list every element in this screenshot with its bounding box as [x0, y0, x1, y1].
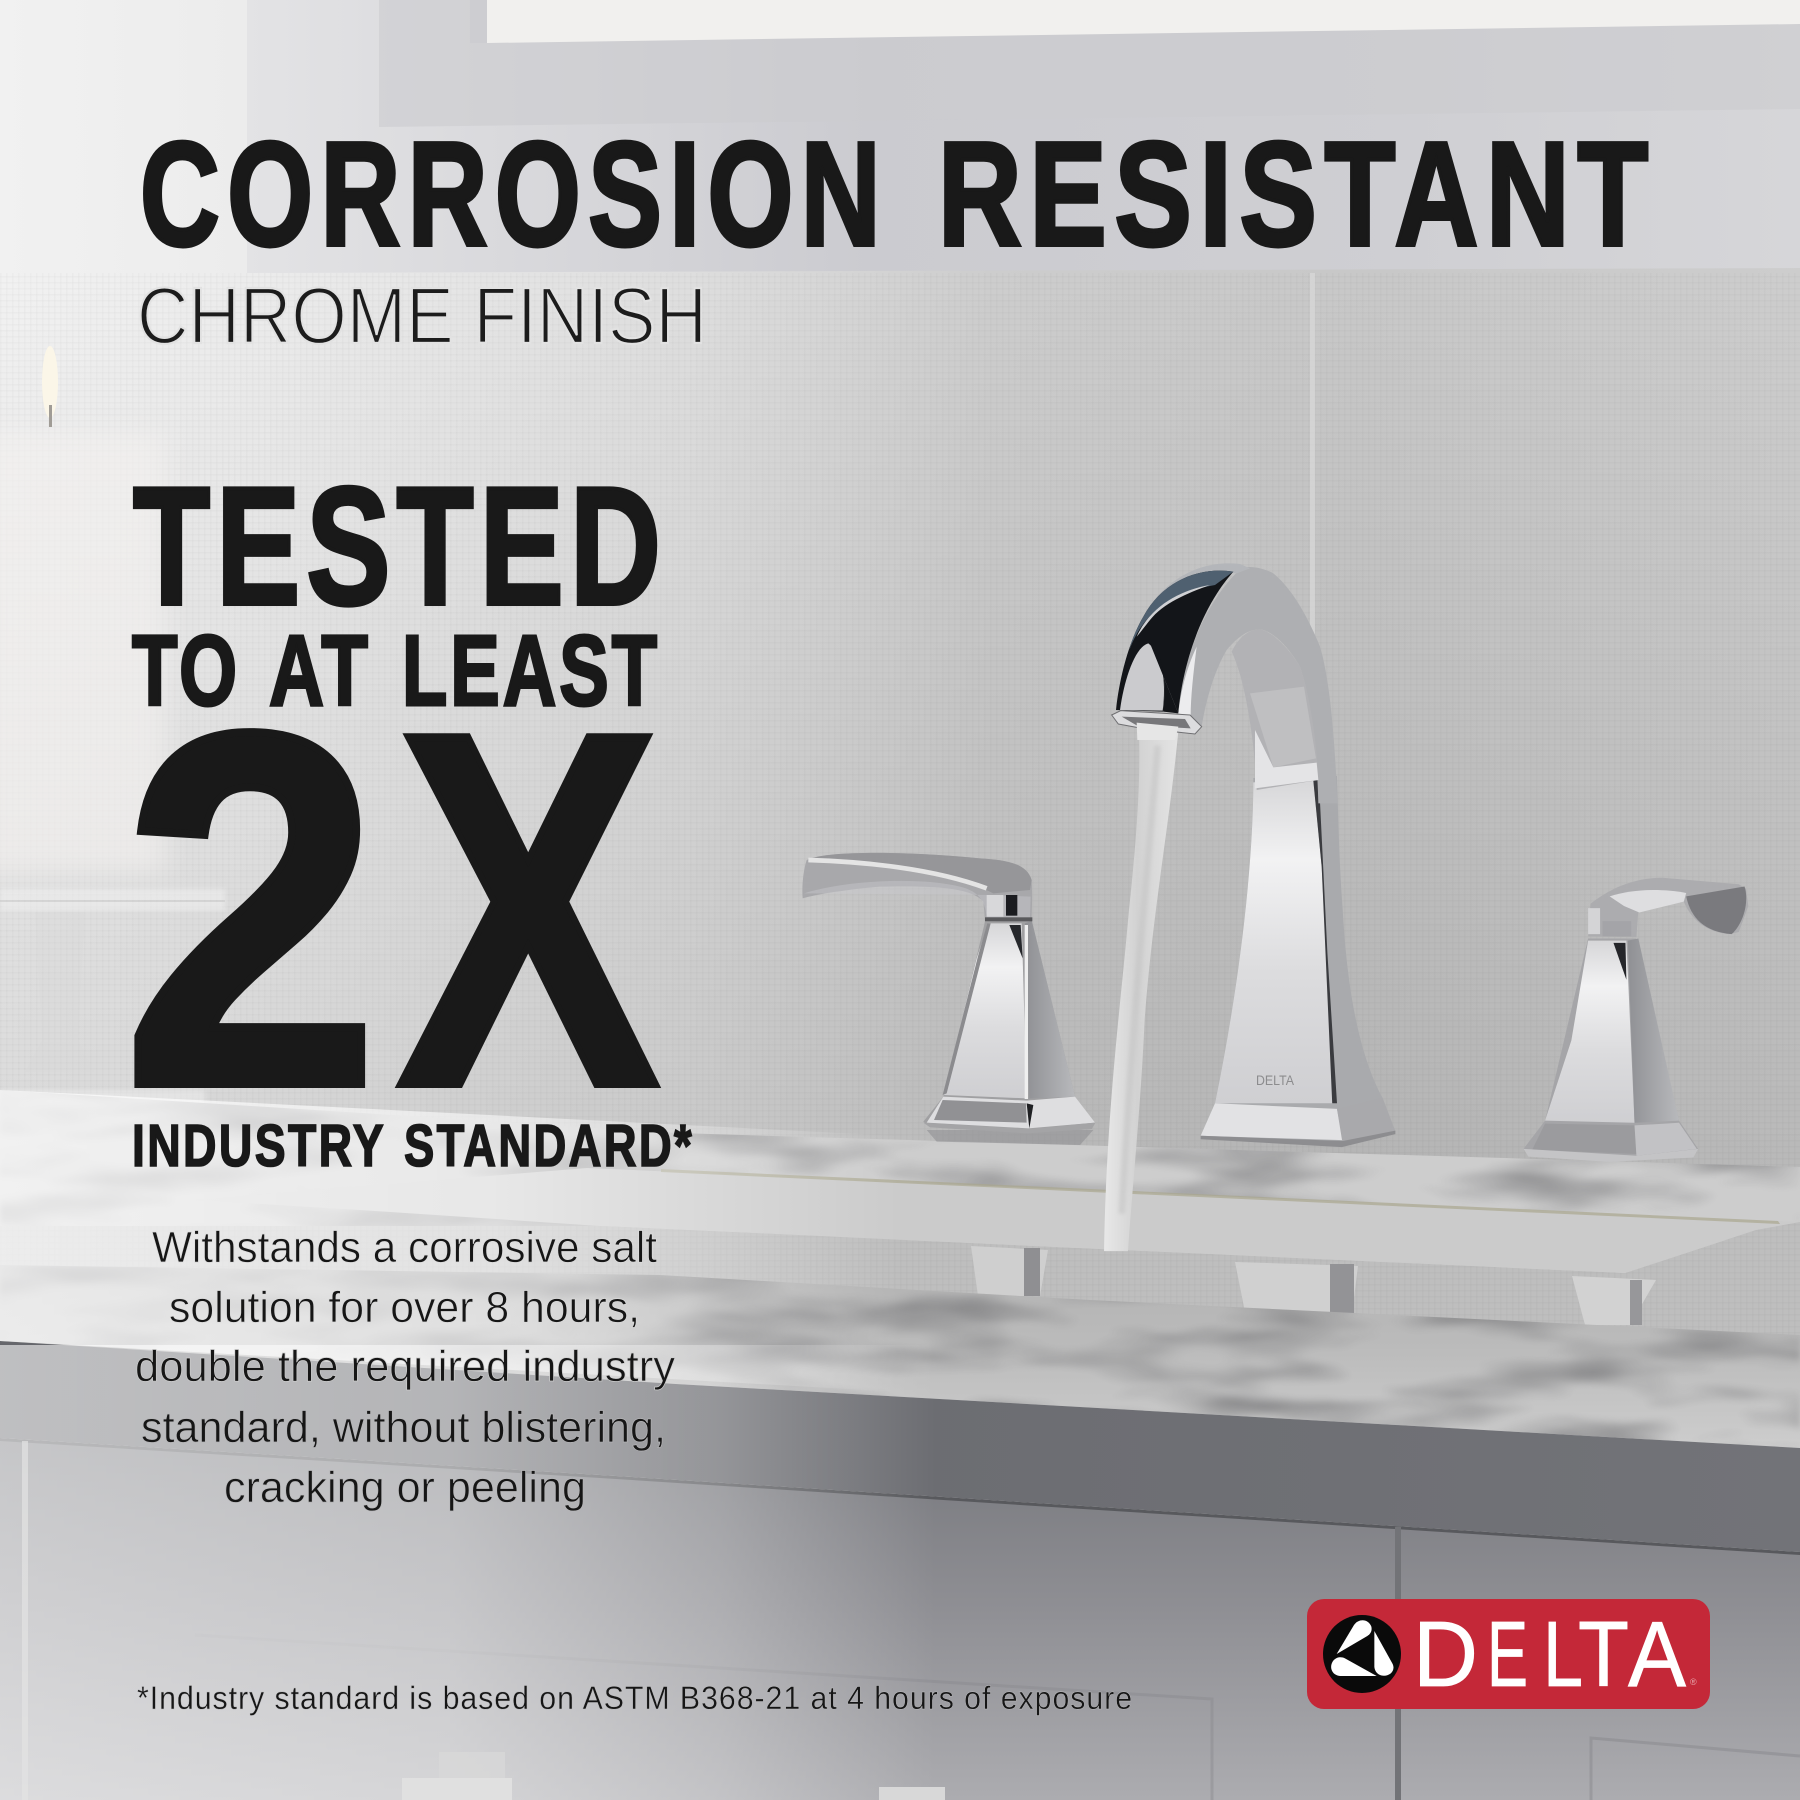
- background: glass cake stand: [0, 889, 225, 1136]
- body text: solution for over 8 hours,: [169, 1283, 640, 1332]
- Delta logo: [1307, 1599, 1710, 1709]
- body text: double the required industry: [135, 1342, 675, 1391]
- headline: industry standard: INDUSTRY: [132, 1113, 386, 1179]
- headline: tested: TESTED: [133, 452, 667, 640]
- headline: to at least: AT: [269, 615, 371, 727]
- cabinet door pull: [879, 1787, 945, 1800]
- headline: 2X: [122, 628, 661, 1191]
- background: candle: [0, 346, 165, 873]
- headline: industry standard: STANDARD*: [404, 1113, 694, 1179]
- faucet brand mark: DELTA: [1256, 1072, 1295, 1088]
- cabinet drawer pull: [402, 1752, 512, 1800]
- logo mark petals: [1331, 1620, 1393, 1676]
- background: marble counter front edge: [0, 1265, 1800, 1448]
- body text: standard, without blistering,: [141, 1403, 666, 1452]
- footnote: *Industry standard is based on ASTM B368-21 at 4 hours of exposure: [137, 1680, 1133, 1716]
- body text: [135, 1223, 675, 1512]
- logo wordmark: T: [1578, 1602, 1629, 1706]
- headline: to at least: TO: [132, 615, 240, 727]
- left faucet handle: [802, 853, 1095, 1145]
- headline: to at least: [132, 615, 660, 727]
- background: mirror frame and window: [247, 0, 1800, 273]
- logo wordmark: E: [1487, 1602, 1528, 1706]
- headline: to at least: LEAST: [402, 615, 660, 727]
- logo wordmark: A: [1628, 1602, 1686, 1706]
- headline: 2X: 2: [122, 628, 380, 1191]
- body text: cracking or peeling: [224, 1463, 586, 1512]
- background: vanity band under counter: [0, 1341, 1800, 1557]
- logo wordmark: D: [1413, 1602, 1478, 1706]
- center faucet spout: [1112, 563, 1337, 803]
- title: [140, 112, 1656, 277]
- logo wordmark: L: [1543, 1602, 1583, 1706]
- background: left light wash over counter and cabinet: [0, 1090, 1800, 1800]
- headline: 2X: X: [397, 628, 661, 1191]
- logo registered mark: ®: [1690, 1677, 1697, 1687]
- background: sink basin lip: [194, 1168, 1800, 1273]
- background: cabinet doors: [0, 1441, 1800, 1800]
- background: bathroom wall: [0, 0, 1800, 1200]
- body text: Withstands a corrosive salt: [152, 1223, 657, 1272]
- headline: industry standard: [132, 1113, 694, 1179]
- background: marble counter top ledge: [0, 1090, 1800, 1240]
- water stream: [1104, 724, 1178, 1251]
- center faucet body: [1201, 776, 1395, 1147]
- right faucet handle: [1524, 878, 1748, 1162]
- subtitle: CHROME FINISH: [137, 271, 707, 360]
- logo wordmark: [1413, 1602, 1686, 1706]
- background: sink basin reflection: [0, 1222, 1800, 1340]
- title: CORROSION: [140, 112, 888, 277]
